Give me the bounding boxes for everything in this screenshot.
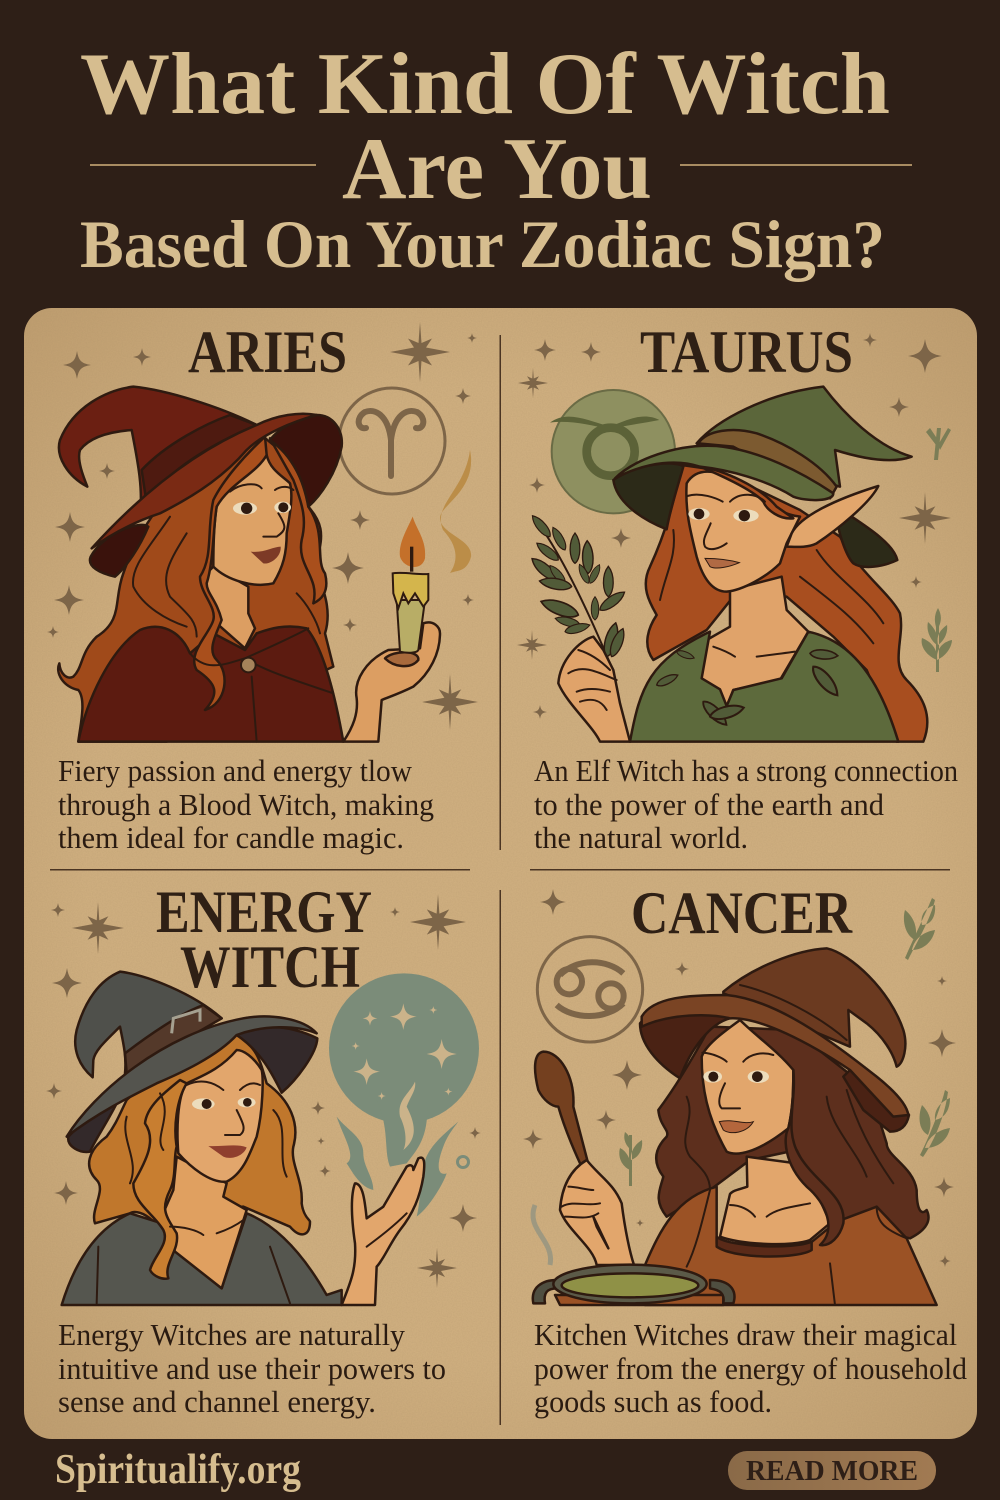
Cancer witch bbox=[533, 937, 937, 1305]
Aries description bbox=[58, 753, 434, 855]
Cancer herbs bbox=[619, 898, 950, 1186]
Aries clasp bbox=[241, 658, 256, 672]
parchment panel bbox=[24, 308, 977, 1439]
panel: Taurus bbox=[517, 319, 958, 855]
Taurus description: An Elf Witch has a strong connection bbox=[534, 753, 958, 788]
Taurus heading: TAURUS bbox=[640, 319, 853, 385]
Aries description: them ideal for candle magic. bbox=[58, 820, 404, 855]
Aries smoke bbox=[440, 450, 471, 573]
Taurus description bbox=[534, 753, 958, 855]
Energy description bbox=[58, 1317, 446, 1419]
Energy Witch heading bbox=[156, 879, 372, 1000]
Taurus face details bbox=[687, 495, 765, 568]
Energy witch bbox=[62, 972, 479, 1305]
Energy description: Energy Witches are naturally bbox=[58, 1317, 405, 1352]
title bbox=[80, 36, 912, 282]
Energy face details bbox=[187, 1081, 260, 1158]
Taurus description: to the power of the earth and bbox=[534, 787, 884, 822]
Taurus description: the natural world. bbox=[534, 820, 748, 855]
panel: Cancer bbox=[523, 880, 967, 1419]
Aries stars bbox=[47, 322, 478, 730]
Energy Witch heading: WITCH bbox=[180, 934, 360, 1000]
Aries description: Fiery passion and energy tlow bbox=[58, 753, 413, 788]
Aries face details bbox=[230, 484, 293, 564]
Cancer description: goods such as food. bbox=[534, 1384, 772, 1419]
Taurus witch bbox=[529, 387, 927, 742]
Energy orb and smoke bbox=[329, 973, 479, 1217]
Energy hat buckle bbox=[172, 1010, 200, 1033]
Aries hair strands bbox=[133, 517, 320, 637]
title: What Kind Of Witch bbox=[80, 36, 890, 133]
Taurus stars bbox=[517, 333, 951, 719]
footer: read more button: READ MORE bbox=[746, 1456, 918, 1487]
Aries witch bbox=[58, 387, 440, 742]
Cancer description: Kitchen Witches draw their magical bbox=[534, 1317, 957, 1352]
Energy bead bbox=[458, 1156, 468, 1168]
Taurus dress leaves bbox=[655, 649, 842, 728]
Cancer heading: CANCER bbox=[631, 880, 853, 946]
Aries zodiac symbol bbox=[339, 388, 445, 494]
Cancer zodiac symbol bbox=[537, 937, 643, 1042]
panel: Energy Witch bbox=[46, 879, 481, 1419]
Cancer description: power from the energy of household bbox=[534, 1351, 967, 1386]
Cancer description bbox=[534, 1317, 967, 1419]
Energy Witch heading: ENERGY bbox=[156, 879, 372, 945]
Cancer face details bbox=[702, 1053, 773, 1133]
Aries cloak folds bbox=[190, 628, 333, 742]
Cancer stars bbox=[523, 889, 956, 1267]
footer: site name: Spiritualify.org bbox=[55, 1447, 301, 1493]
Cancer hand and hair lines bbox=[562, 1090, 907, 1305]
Taurus hand and hair lines bbox=[568, 530, 883, 710]
Energy description: intuitive and use their powers to bbox=[58, 1351, 446, 1386]
Aries heading: ARIES bbox=[188, 319, 347, 385]
Cancer steam bbox=[533, 1205, 551, 1265]
Taurus right herbs bbox=[922, 428, 952, 672]
Cancer hat band bbox=[740, 985, 847, 1040]
panel: Aries bbox=[47, 319, 478, 855]
Taurus zodiac symbol bbox=[550, 390, 675, 513]
Aries description: through a Blood Witch, making bbox=[58, 787, 434, 822]
Energy orb stars bbox=[352, 1003, 457, 1150]
Aries candle bbox=[393, 517, 428, 653]
Taurus herb sprig bbox=[529, 513, 628, 663]
title: Based On Your Zodiac Sign? bbox=[80, 206, 885, 282]
Energy hair and fold lines bbox=[97, 1093, 407, 1303]
Energy description: sense and channel energy. bbox=[58, 1384, 376, 1419]
footer: read more button bbox=[728, 1451, 936, 1490]
Energy Witch stars bbox=[46, 894, 481, 1288]
title: Are You bbox=[342, 121, 652, 218]
